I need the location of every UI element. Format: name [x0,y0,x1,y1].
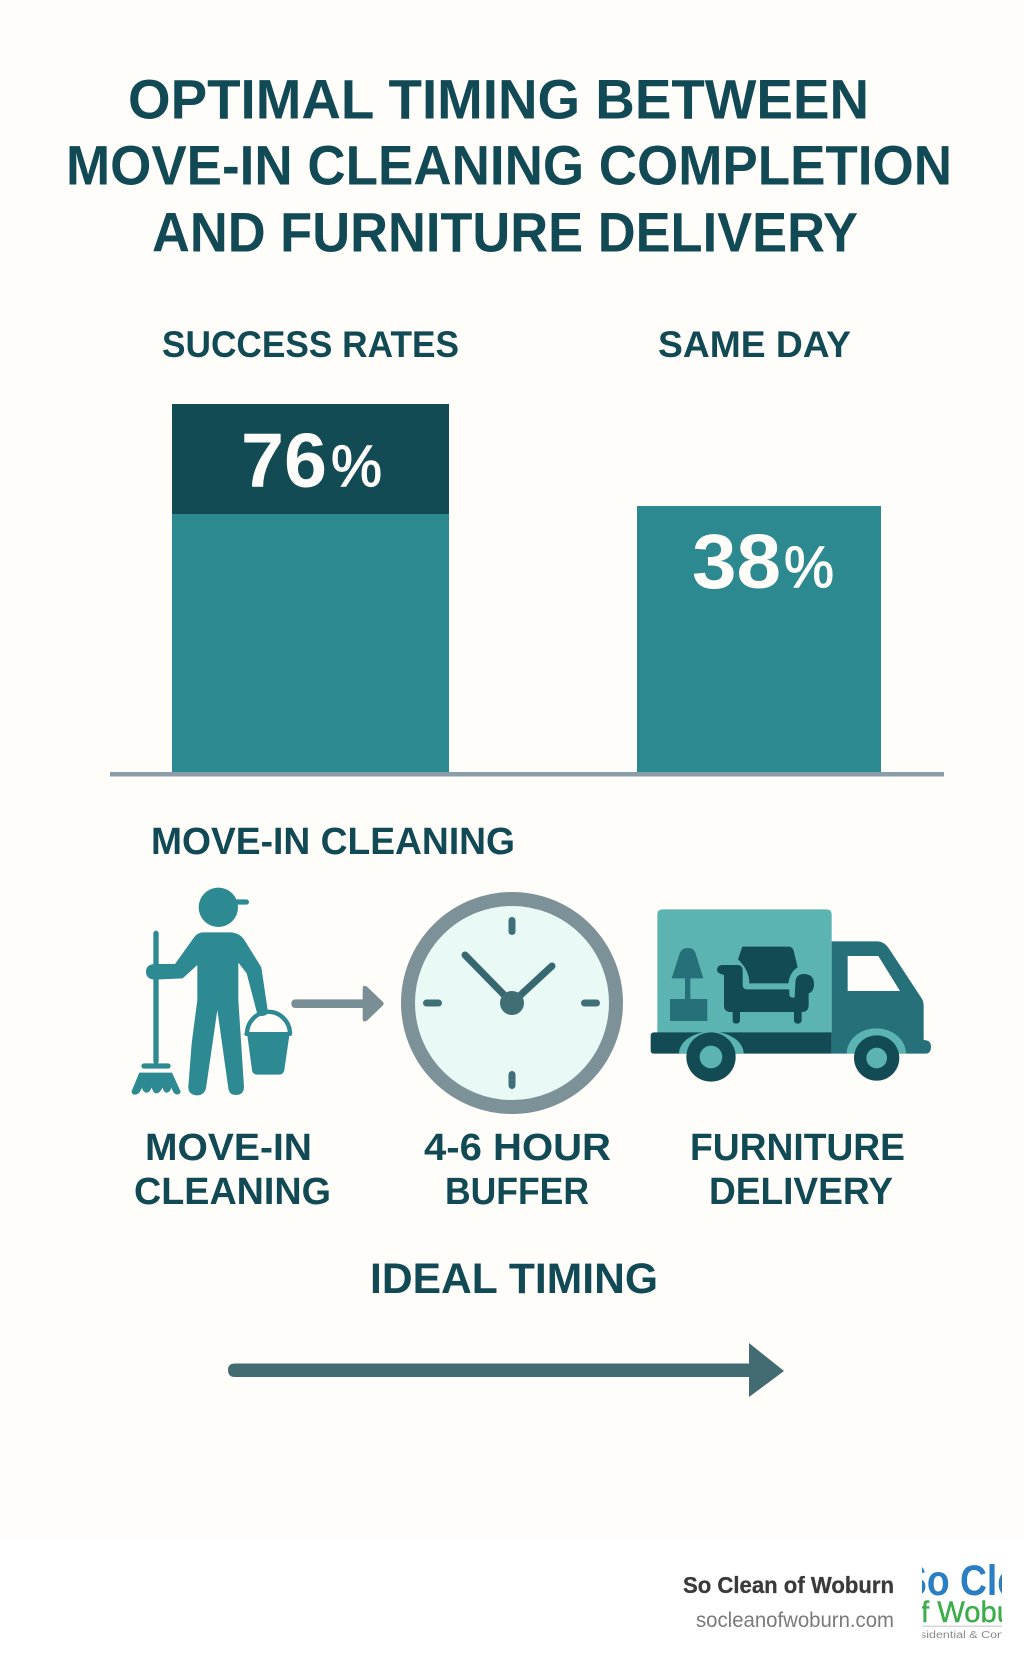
title [66,68,952,264]
bar: same day 38%: 38 [692,519,781,605]
footer logo: sidential & Con [920,1630,1004,1641]
armchair [717,947,814,1024]
label: furniture delivery: DELIVERY [709,1171,893,1213]
wheel arches [679,1032,744,1054]
label: 4-6 hour buffer [424,1127,611,1213]
bar chart [110,404,944,776]
truck cab [832,941,931,1054]
title: OPTIMAL TIMING BETWEEN [128,68,869,130]
heading: move-in cleaning: MOVE-IN CLEANING [151,821,515,863]
label: furniture delivery [690,1127,905,1213]
label: furniture delivery: FURNITURE [690,1127,905,1169]
label: move-in cleaning [134,1127,331,1213]
chart axis [110,772,944,776]
bar: success rates 76%: 76 [241,418,327,504]
label: 4-6 hour buffer: BUFFER [445,1171,589,1213]
chassis [651,1032,832,1054]
heading: same day: SAME DAY [658,324,851,365]
bar: same day 38% [637,506,881,772]
arrow: timeline [228,1343,784,1397]
bar: success rates 76%: % [331,434,382,499]
heading: success rates: SUCCESS RATES [162,324,459,365]
front and rear wheels [686,1032,899,1082]
icon: clock [408,899,616,1107]
footer brand text [683,1572,894,1632]
label: move-in cleaning: CLEANING [134,1171,331,1213]
truck box [657,909,832,1037]
bar: success rates 76% [172,404,449,772]
footer brand text: So Clean of Woburn [683,1572,894,1598]
cab window [848,956,900,991]
footer logo [922,1564,1002,1638]
icon: cleaner with broom and bucket [132,888,292,1095]
arrow: cleaning to buffer [291,986,384,1022]
label: 4-6 hour buffer: 4-6 HOUR [424,1127,611,1169]
icon: delivery truck with furniture [651,909,931,1082]
footer brand text: socleanofwoburn.com [696,1609,894,1632]
footer logo: f Wobu [921,1596,1013,1629]
heading: ideal timing: IDEAL TIMING [370,1255,658,1303]
title: MOVE-IN CLEANING COMPLETION [66,134,952,196]
bar: same day 38%: % [784,535,834,600]
label: move-in cleaning: MOVE-IN [145,1127,312,1169]
title: AND FURNITURE DELIVERY [152,200,858,264]
lamp [670,948,707,1021]
